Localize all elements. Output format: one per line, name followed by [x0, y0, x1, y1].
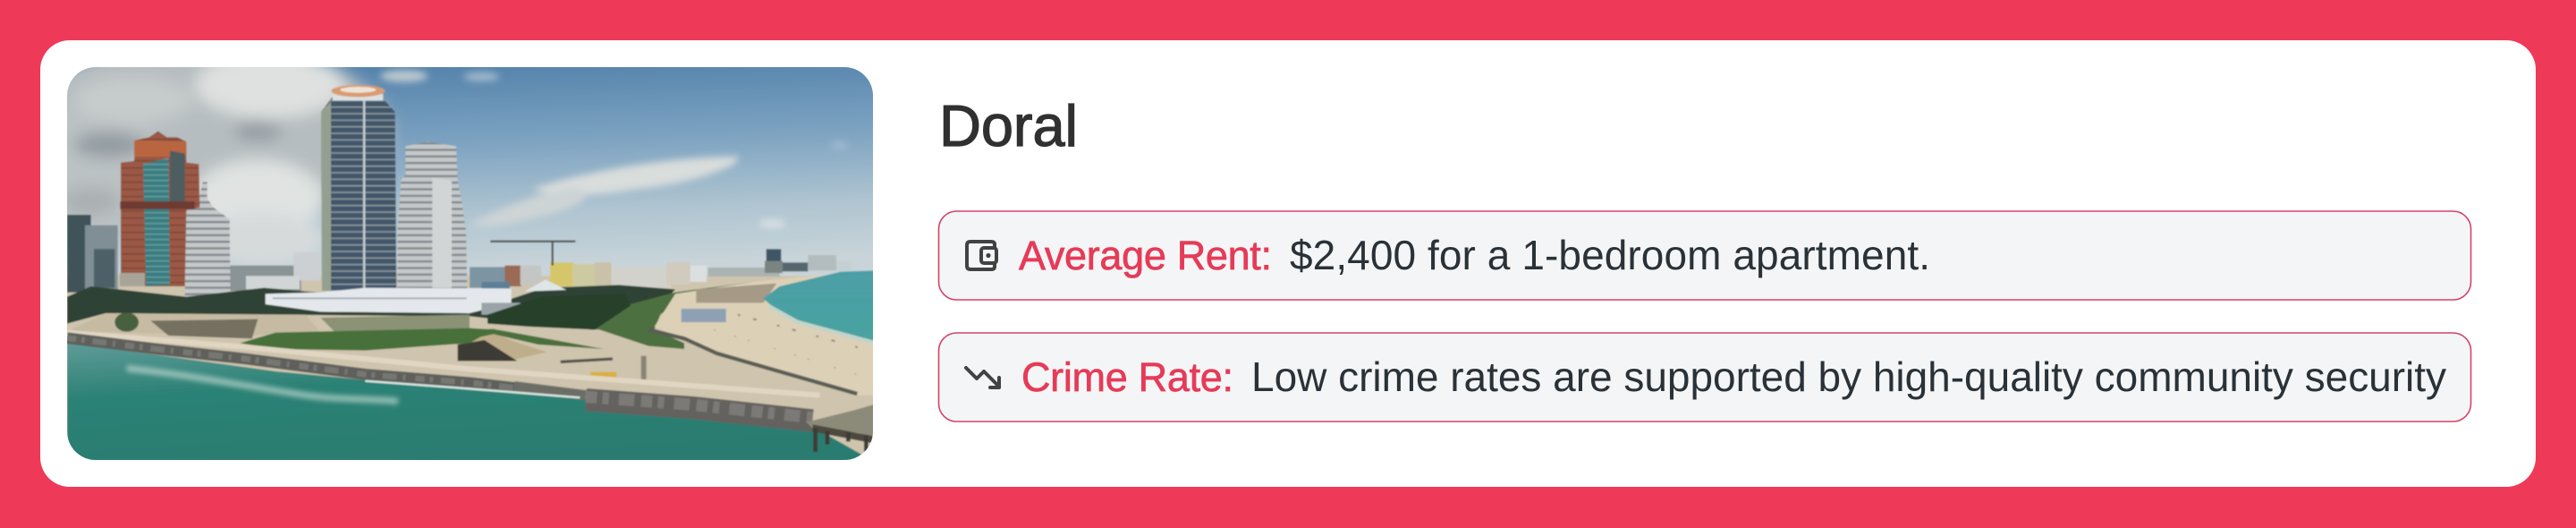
icon: wallet [967, 242, 996, 269]
sand hill and dark mound [458, 333, 546, 360]
red tower [121, 132, 199, 286]
mid distance buildings [230, 266, 301, 291]
value: crime rate: Low crime rates are supported by high-quality community security [1251, 353, 2446, 400]
pavilion roof [525, 279, 566, 292]
right sea [763, 270, 875, 343]
beach skyline photo [67, 67, 873, 460]
left distant towers [67, 215, 91, 293]
distant beachfront buildings [469, 240, 837, 290]
park sand and trees [67, 313, 320, 336]
value: average rent: $2,400 for a 1-bedroom apartment. [1290, 232, 1930, 278]
post [641, 356, 647, 383]
seawall [648, 329, 857, 394]
row background [939, 211, 2470, 300]
info row: crime rate [939, 333, 2470, 422]
lawn strip [470, 329, 604, 349]
label: crime rate: Crime Rate: [1021, 354, 1233, 400]
row background [939, 333, 2470, 422]
low white building [266, 288, 512, 313]
ground sand [67, 313, 857, 419]
pier [807, 405, 875, 452]
trees band [67, 285, 675, 329]
info row: average rent [939, 211, 2470, 300]
second white tower [397, 141, 467, 289]
rocks [67, 338, 514, 387]
heading: Doral [939, 93, 1078, 158]
foam [127, 369, 398, 401]
main round tower [321, 97, 396, 291]
lawn [240, 328, 494, 351]
label: average rent: Average Rent: [1019, 233, 1272, 278]
beach [655, 273, 875, 396]
path [67, 333, 820, 396]
clouds [67, 67, 400, 265]
water [67, 343, 878, 464]
white tower behind [185, 182, 231, 297]
green park [595, 282, 753, 349]
crane [490, 242, 575, 266]
icon: trending down [966, 368, 999, 387]
